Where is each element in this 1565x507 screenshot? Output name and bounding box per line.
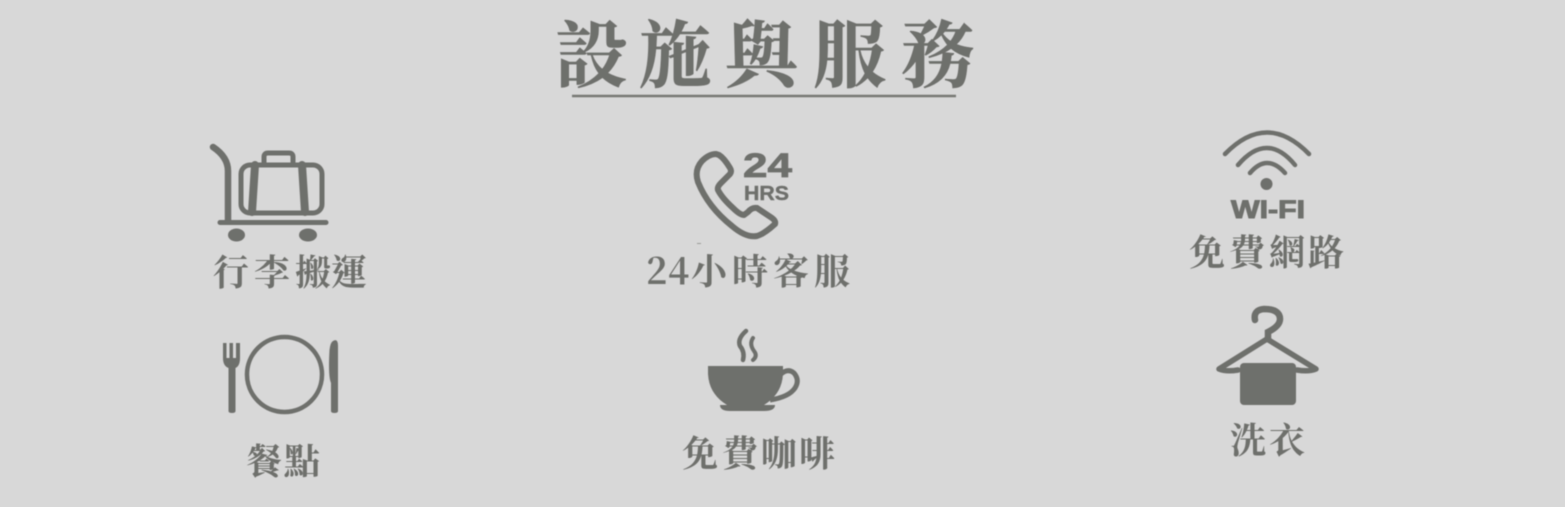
- label: free wifi: 免費網路: [1189, 225, 1344, 276]
- service: meals: [223, 337, 338, 485]
- title: 設施與服務: [555, 0, 974, 102]
- icon: phone 24 hours: 24: [743, 147, 792, 185]
- label: laundry: 洗衣: [1230, 413, 1305, 464]
- icon: wifi: [1225, 132, 1309, 224]
- icon: coffee cup: [708, 331, 797, 411]
- icon: luggage cart: [213, 147, 326, 242]
- icon: hanger with towel: [1219, 309, 1316, 405]
- service: 24 hour support: [646, 147, 850, 295]
- service: free wifi: [1189, 132, 1344, 276]
- icon: phone 24 hours: [697, 147, 792, 244]
- icon: wifi: WI-FI: [1231, 196, 1305, 224]
- label: luggage: 行李搬運: [213, 245, 367, 296]
- icon: phone 24 hours: HRS: [744, 183, 789, 205]
- icon: plate and cutlery: [223, 337, 338, 413]
- label: meals: 餐點: [246, 434, 320, 485]
- label: 24 hour support: 24小時客服: [646, 244, 850, 295]
- label: free coffee: 免費咖啡: [682, 426, 835, 477]
- service: luggage: [213, 147, 367, 296]
- service: free coffee: [682, 331, 835, 477]
- service: laundry: [1219, 309, 1316, 464]
